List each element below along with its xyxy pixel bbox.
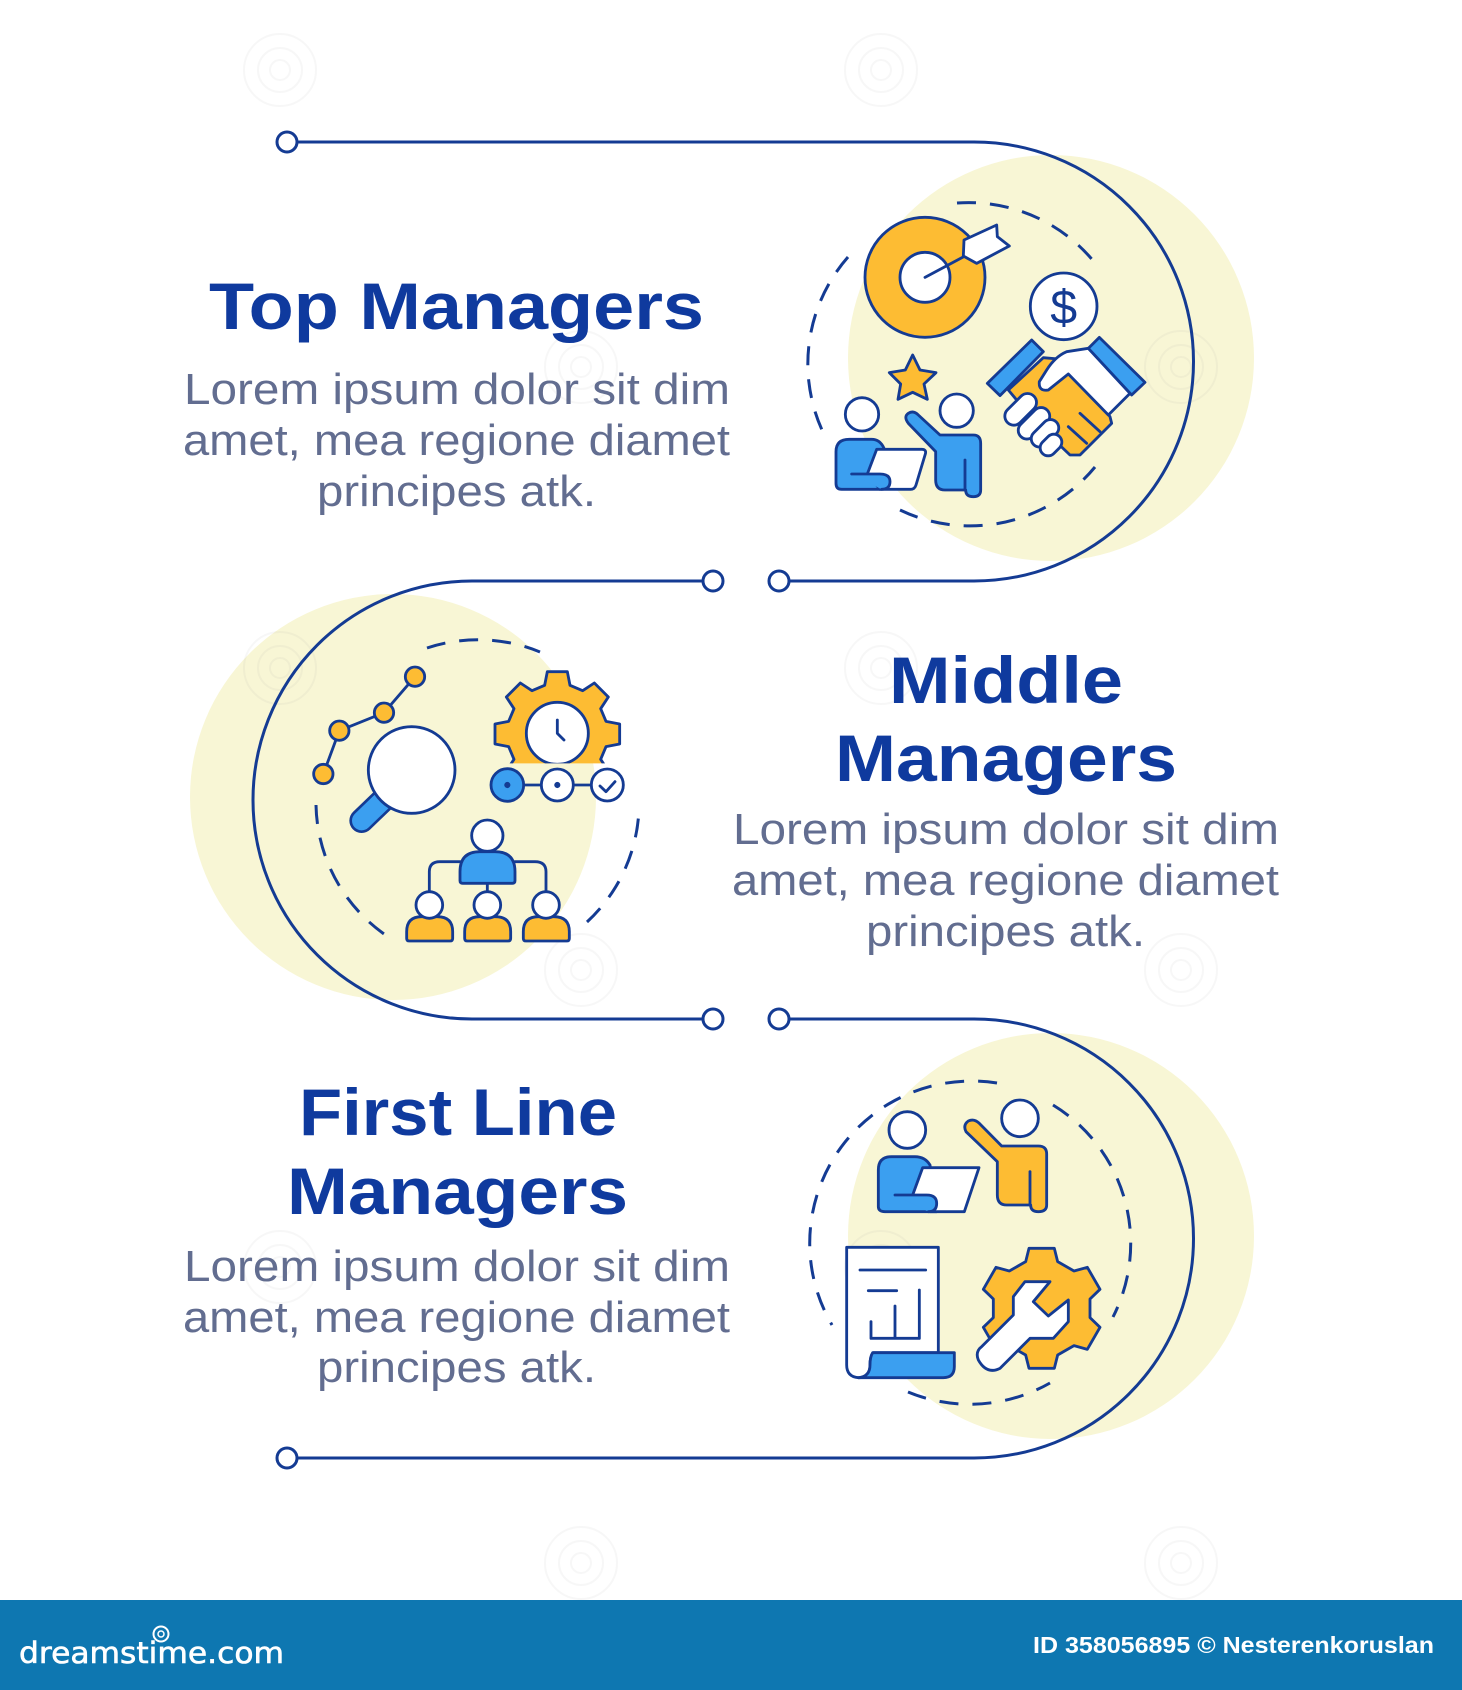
- icon: line chart: [314, 667, 425, 784]
- icon: magnifier: [362, 727, 455, 821]
- connector: top curve: [277, 132, 1194, 591]
- icon: person with laptop: [878, 1112, 979, 1212]
- icon: dollar coin: $: [1050, 280, 1077, 334]
- circle: middle background: [190, 594, 596, 1000]
- icon: handshake: [987, 337, 1145, 459]
- dashed ring: top: [808, 203, 1095, 526]
- icon: person pointing: [906, 394, 981, 497]
- text block: top description: [183, 365, 730, 516]
- connector: bottom curve: [277, 1009, 1194, 1468]
- circle: top background: [848, 155, 1254, 561]
- icon: report document: [847, 1247, 954, 1378]
- icons: first line managers: [847, 1100, 1100, 1378]
- icon: dollar coin: [1030, 273, 1097, 340]
- dashed ring: middle: [316, 640, 639, 938]
- connector: middle curve: [253, 571, 723, 1029]
- circle: bottom background: [848, 1033, 1254, 1439]
- text block: middle description: principes atk.: [866, 907, 1145, 956]
- heading: First Line Managers: [287, 1075, 628, 1228]
- icon: org chart: [407, 820, 569, 941]
- icons: middle managers: [314, 667, 623, 941]
- text block: top description: amet, mea regione diamet: [183, 416, 730, 465]
- text block: first line description: amet, mea regione diamet: [183, 1293, 730, 1342]
- text block: middle description: amet, mea regione diamet: [732, 856, 1279, 905]
- footer logo: dreamstime.com: [19, 1636, 284, 1670]
- icon: person pointing: [965, 1100, 1047, 1212]
- text block: top description: Lorem ipsum dolor sit dim: [184, 365, 730, 414]
- heading: Middle Managers: Managers: [835, 721, 1177, 795]
- footer bar: [0, 1600, 1462, 1690]
- heading: Middle Managers: Middle: [889, 643, 1123, 717]
- icon: progress nodes: [491, 769, 623, 801]
- text block: middle description: [732, 805, 1279, 956]
- icon: star: [889, 355, 936, 399]
- icon: gear with wrench: [977, 1248, 1100, 1370]
- icons: top managers: [836, 217, 1145, 497]
- text block: middle description: Lorem ipsum dolor sit dim: [733, 805, 1279, 854]
- footer credit: ID 358056895 © Nesterenkoruslan: [1033, 1632, 1434, 1658]
- text block: first line description: principes atk.: [317, 1343, 596, 1392]
- text block: first line description: Lorem ipsum dolor sit dim: [184, 1242, 730, 1291]
- heading: Middle Managers: [835, 643, 1177, 795]
- icon: gear with clock: [494, 670, 622, 764]
- heading: First Line Managers: First Line: [299, 1075, 617, 1149]
- heading: First Line Managers: Managers: [287, 1154, 628, 1228]
- icon: target with arrow: [865, 217, 1009, 337]
- dashed ring: bottom: [810, 1081, 1131, 1404]
- icon: person with laptop: [836, 398, 926, 489]
- heading: Top Managers: Top Managers: [209, 269, 704, 343]
- text block: top description: principes atk.: [317, 467, 596, 516]
- text block: first line description: [183, 1242, 730, 1392]
